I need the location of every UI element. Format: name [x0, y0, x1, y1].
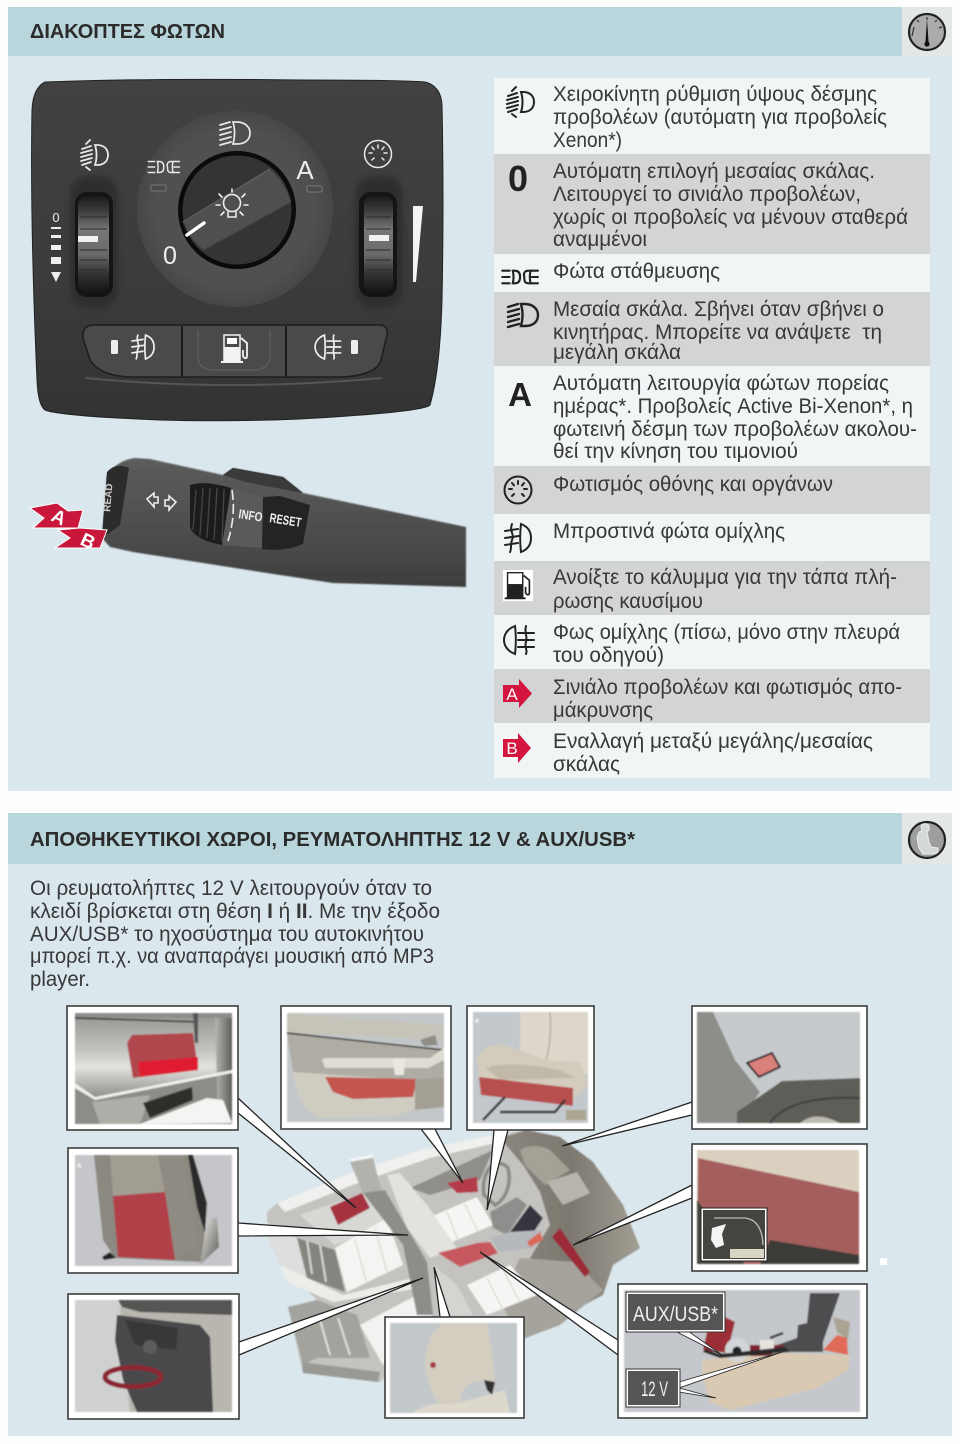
icon: B arrow: B: [506, 739, 518, 758]
text: stalk A: [553, 676, 902, 722]
rear left side: [267, 1222, 307, 1278]
B pillar: [350, 1158, 382, 1193]
arrow: B: [55, 528, 107, 554]
row: front fog: [494, 514, 930, 561]
asterisk: *: [474, 1015, 480, 1032]
row: instrument lighting: [494, 466, 930, 514]
icon: beam height: [81, 140, 108, 170]
illustration: car interior cutaway: [267, 1130, 640, 1382]
text: sockets description: μπορεί π.χ. να αναπαράγει μουσική από MP3: [30, 945, 434, 968]
text: A auto: [553, 372, 917, 463]
panel: storage, 12 V socket, AUX/USB: [8, 813, 952, 1436]
row: low beam: [494, 292, 930, 366]
text: sockets description: player.: [30, 968, 90, 991]
text: fuel cap: Ανοίξτε το κάλυμμα για την τάπα πλή-: [553, 566, 897, 589]
icon: parking lights: [148, 161, 179, 173]
rear seat lower: [360, 1295, 433, 1365]
label: INFO: INFO: [238, 506, 264, 525]
text: front fog: Μπροστινά φώτα ομίχλης: [553, 520, 785, 543]
icon: beam height: [507, 87, 534, 117]
arrow: A: A: [48, 505, 69, 530]
car shell: [267, 1130, 640, 1382]
label: READ: READ: [102, 483, 115, 512]
left thumb wheel: [70, 176, 118, 308]
text: A auto: ημέρας*. Προβολείς Active Bi-Xenon*, η: [553, 395, 913, 418]
row: parking lights: [494, 254, 930, 292]
icon: low beam: [508, 304, 538, 327]
text: rear fog: του οδηγού): [553, 644, 664, 667]
text: sockets description: AUX/USB* το ηχοσύστημα του αυτοκινήτου: [30, 923, 424, 946]
icon: rear fog: [504, 626, 534, 654]
icon: instrument lighting: [504, 476, 532, 504]
text: beam height: προβολέων (αυτόματη για προβολείς: [553, 106, 887, 129]
table: symbol explanations: [494, 78, 930, 778]
heading: ΔΙΑΚΟΠΤΕΣ ΦΩΤΩΝ: ΔΙΑΚΟΠΤΕΣ ΦΩΤΩΝ: [30, 21, 225, 43]
wedge: brightness scale: [413, 206, 423, 282]
panel: light switches: [8, 7, 952, 791]
label: AUX/USB: [626, 1292, 725, 1332]
right thumb wheel: [355, 176, 403, 308]
callout: armrest sockets: [618, 1284, 867, 1418]
heading: storage: ΑΠΟΘΗΚΕΥΤΙΚΟΙ ΧΩΡΟΙ, ΡΕΥΜΑΤΟΛΗΠΤΗΣ 12 V & AUX/USB*: [30, 829, 635, 851]
text: 0: [553, 160, 908, 251]
arm sill: [280, 1265, 420, 1302]
heading bar: light switches: [8, 7, 952, 56]
text: sockets description: κλειδί βρίσκεται στη θέση I ή II. Με την έξοδο: [30, 900, 440, 923]
callout: glove box: [692, 1144, 867, 1271]
red storage: glovebox: [552, 1228, 590, 1277]
illustration: headlight control panel: [32, 79, 443, 421]
icon: parking lights: [502, 271, 538, 283]
callout: headrest: [385, 1317, 524, 1418]
text: 0: Λειτουργεί το σινιάλο προβολέων,: [553, 183, 861, 206]
label: 12 V: 12 V: [641, 1378, 668, 1401]
asterisk: *: [76, 1159, 83, 1178]
icon: front fog: [111, 335, 154, 359]
floor and dash lower: [500, 1258, 603, 1340]
text: low beam: μεγάλη σκάλα: [553, 341, 681, 364]
illustration: stalk control: [102, 458, 466, 587]
text: fuel cap: ρωσης καυσίμου: [553, 590, 703, 613]
roof edge: [277, 1135, 500, 1212]
text: instrument lighting: Φωτισμός οθόνης και οργάνων: [553, 473, 833, 496]
text: parking lights: Φώτα στάθμευσης: [553, 260, 720, 283]
label: 0: 0: [163, 242, 177, 270]
row: A auto: [494, 366, 930, 466]
red storage: console: [438, 1242, 498, 1267]
centre tunnel light: [387, 1173, 457, 1258]
text: 0: χωρίς οι προβολείς να μένουν σταθερά: [553, 206, 908, 229]
heading bar: storage: [8, 813, 952, 864]
label: A: A: [296, 155, 314, 185]
text: rear fog: Φως ομίχλης (πίσω, μόνο στην πλευρά: [553, 621, 900, 644]
row: stalk B: [494, 723, 930, 778]
text: sockets description: [30, 877, 440, 991]
callout: rear door pocket: [67, 1006, 238, 1130]
text: low beam: κινητήρας. Μπορείτε να ανάψετε τη: [553, 321, 882, 344]
front seat lower: [467, 1265, 537, 1315]
dash shell: [500, 1130, 640, 1308]
icon: A arrow: [503, 679, 532, 708]
rotary dial: [137, 111, 333, 307]
callout: A pillar pocket: [692, 1006, 867, 1129]
icon: turn arrows: [147, 493, 176, 510]
scale: beam height levels: [51, 210, 61, 282]
row: 0: [494, 154, 930, 254]
rear seat upper: [335, 1218, 403, 1292]
text: stalk B: [553, 730, 873, 776]
arrow: B: B: [77, 529, 98, 554]
text: low beam: Μεσαία σκάλα. Σβήνει όταν σβήνει ο: [553, 298, 884, 321]
icon: A arrow: A: [506, 685, 518, 704]
text: stalk B: σκάλας: [553, 753, 620, 776]
row: stalk A: [494, 669, 930, 723]
front seat upper: [428, 1197, 493, 1247]
text: rear fog: [553, 621, 900, 667]
text: 0: αναμμένοι: [553, 228, 647, 251]
icon: A: A: [508, 376, 532, 413]
text: A auto: Αυτόματη λειτουργία φώτων πορείας: [553, 372, 889, 395]
button row: [83, 325, 387, 385]
text: low beam: [553, 298, 884, 364]
steering wheel: [483, 1163, 509, 1205]
centre console grid: [510, 1205, 543, 1242]
text: beam height: [553, 83, 887, 152]
rear backrest: [297, 1238, 345, 1292]
label: RESET: RESET: [269, 510, 303, 530]
inset: key blade: [701, 1208, 767, 1261]
icon: B arrow: [503, 733, 531, 763]
callout: seat cushion storage: [467, 1006, 594, 1130]
icon: front fog: [505, 524, 531, 552]
text: beam height: Xenon*): [553, 129, 622, 152]
callout: seat back pocket: [68, 1148, 238, 1273]
row: beam height: [494, 78, 930, 154]
icon: seat: [909, 822, 945, 858]
callout: front door pocket: [281, 1006, 451, 1129]
row: rear fog: [494, 615, 930, 669]
icon: 0: 0: [508, 158, 528, 199]
text: 0: Αυτόματη επιλογή μεσαίας σκάλας.: [553, 160, 875, 183]
text: stalk A: Σινιάλο προβολέων και φωτισμός απο-: [553, 676, 902, 699]
red storage: front door: [447, 1177, 478, 1193]
text: stalk A: μάκρυνσης: [553, 699, 653, 722]
arrow: A: [30, 503, 83, 530]
callout: coin holder: [68, 1294, 239, 1419]
text: fuel cap: [553, 566, 897, 613]
icon: fuel cap: [221, 335, 247, 363]
lower rear backrest: [288, 1300, 370, 1365]
row: fuel cap: [494, 561, 930, 615]
door interior: [410, 1150, 493, 1195]
label: AUX/USB: AUX/USB*: [633, 1303, 718, 1326]
pointer lines: [238, 1098, 692, 1355]
label: 12 V: [626, 1369, 680, 1407]
scale: beam height levels: 0: [52, 210, 60, 225]
pointer: 12 V: [679, 1352, 782, 1398]
text: A auto: θεί την κίνηση του τιμονιού: [553, 440, 798, 463]
text: stalk B: Εναλλαγή μεταξύ μεγάλης/μεσαίας: [553, 730, 873, 753]
marker: white dot: [880, 1258, 887, 1265]
door lower upper side: [490, 1197, 527, 1235]
text: sockets description: Οι ρευματολήπτες 12 V λειτουργούν όταν το: [30, 877, 432, 900]
icon: light bulb: [216, 189, 248, 217]
icon: high beam: [220, 122, 250, 145]
icon: gauge: [909, 14, 945, 50]
text: beam height: Χειροκίνητη ρύθμιση ύψους δέσμης: [553, 83, 877, 106]
icon: fuel cap: [503, 570, 533, 601]
icon: rear fog: [315, 335, 358, 359]
red storage: rear door: [330, 1193, 370, 1225]
text: A auto: φωτεινή δέσμη των προβολέων ακολου-: [553, 418, 917, 441]
pointer: AUX: [675, 1331, 722, 1355]
icon: instrument lighting: [364, 140, 392, 168]
